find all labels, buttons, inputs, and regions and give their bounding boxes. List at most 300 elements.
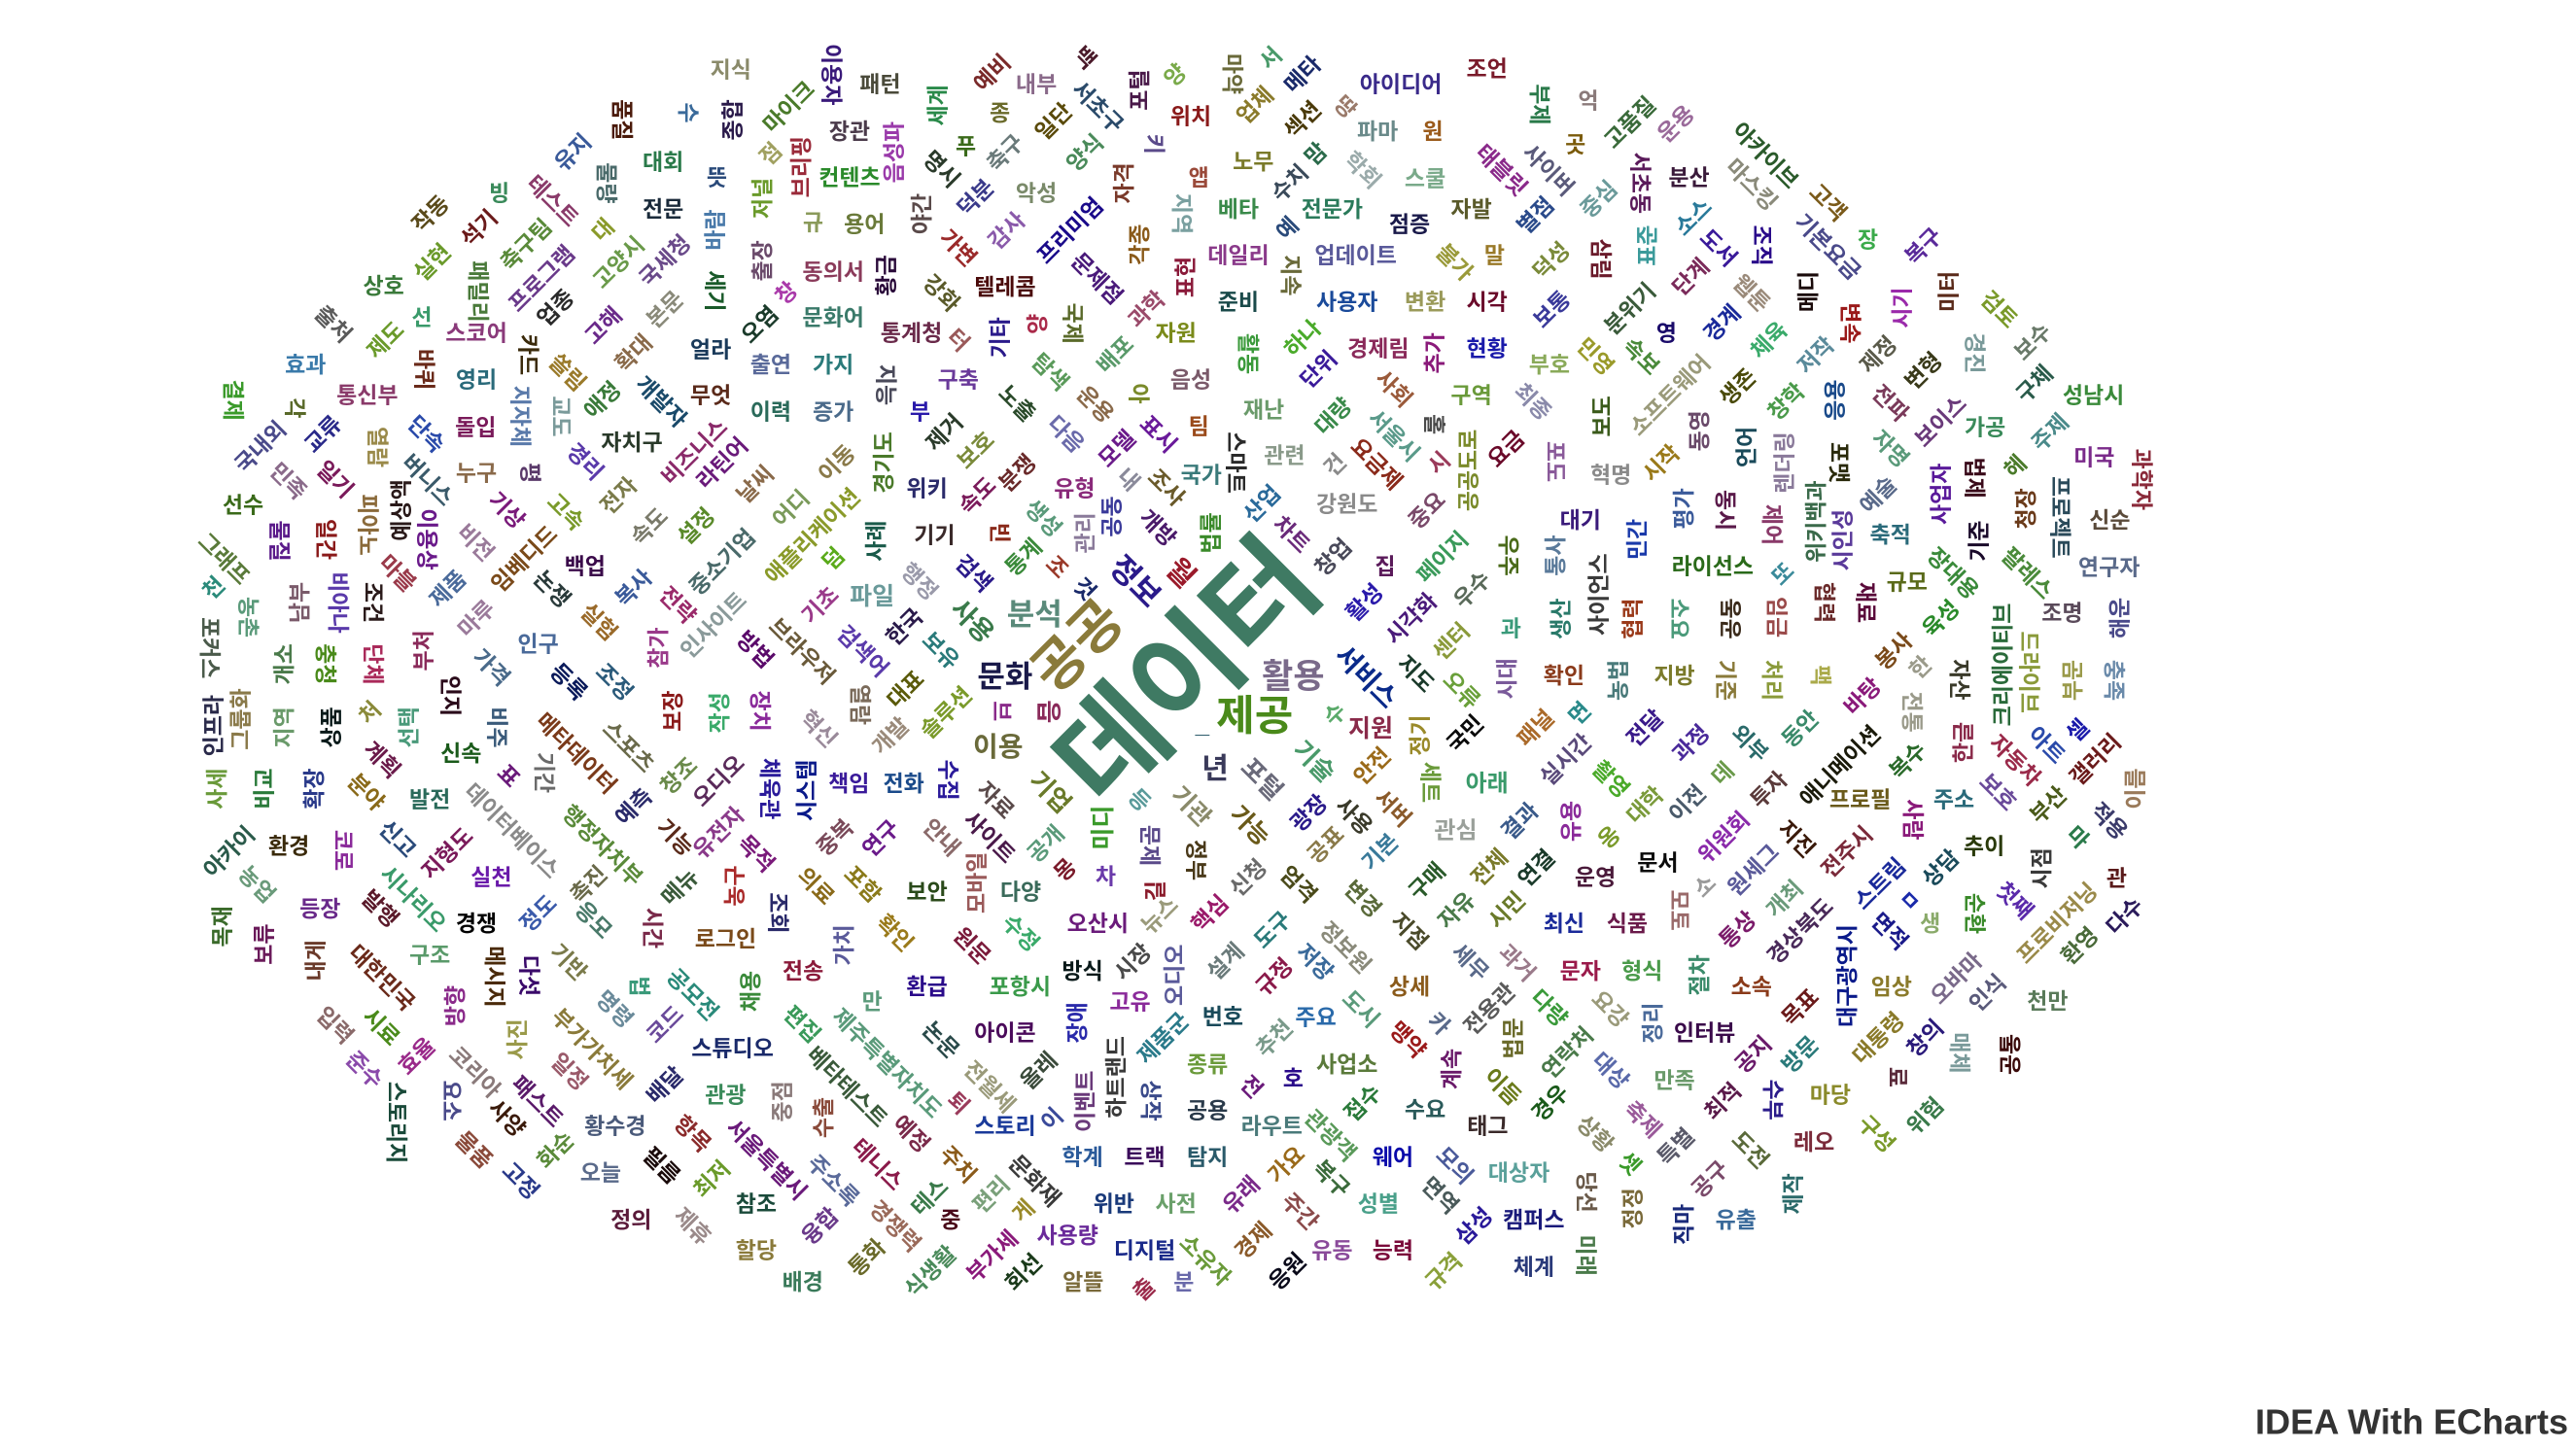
word group: center left: 방법 — [732, 626, 779, 672]
word group: middle left: 예측 — [610, 783, 657, 830]
word group: center right: 전달 — [1621, 705, 1668, 751]
word group: bottom left: 관광 — [705, 1083, 747, 1108]
word group: middle left: 인지 — [438, 675, 464, 716]
word group: center left: 포털 — [1236, 752, 1289, 806]
word group: top center right: 시 — [1423, 447, 1455, 479]
word group: top center left: 지역 — [1169, 193, 1195, 234]
word group: middle right: 갤러리 — [2065, 729, 2126, 790]
word group: bottom center right: 도시 — [1338, 985, 1384, 1032]
word group: top center right: 최종 — [1510, 378, 1556, 425]
word group: middle left: 확장 — [301, 769, 327, 810]
word group: top center left: 악성 — [1016, 180, 1057, 205]
word group: top left: 개발자 — [631, 371, 692, 432]
word group: top center left: 경기도 — [871, 431, 896, 494]
word group: middle right: 자산 — [1947, 659, 1972, 700]
word group: bottom right: 공통 — [1998, 1034, 2023, 1075]
word group: top right: 렌더링 — [1772, 431, 1797, 494]
word group: center left: 생성 — [1020, 495, 1066, 541]
word group: top center left: 위치 — [1170, 103, 1211, 128]
word group: center left: 보안 — [906, 879, 948, 904]
word group: bottom right: 공구 — [1687, 1155, 1733, 1202]
word group: top right: 응용 — [1822, 380, 1847, 421]
word group: bottom center right: 다량 — [1525, 984, 1573, 1031]
word group: top left: 국세청 — [634, 230, 696, 292]
word group: middle right: 드라이브 — [2016, 631, 2041, 713]
word group: center left — [732, 450, 1342, 939]
word group: top left: 자치구 — [601, 430, 663, 455]
word group: middle left: 등장 — [299, 896, 340, 921]
word group: top right: 변속 — [1838, 302, 1863, 343]
word group: middle right: 한글 — [1951, 722, 1976, 763]
word group: top center right: 수치 — [1267, 159, 1313, 206]
word group: top center right: 표준 — [1635, 225, 1660, 266]
word group: middle left: 분야 — [343, 769, 390, 815]
word group: bottom left: 법 — [627, 976, 652, 997]
word group: bottom center left: 식생활 — [900, 1241, 961, 1302]
word group: top right: 보이스 — [1910, 391, 1971, 452]
word group: center right: 면 — [1563, 697, 1596, 730]
word group: center left: 산업 — [1238, 480, 1285, 527]
word group: bottom right — [1687, 970, 2069, 1232]
word group: middle left: 상품 — [318, 707, 343, 747]
word group: middle left: 피아노 — [356, 494, 381, 556]
word group: bottom left: 제휴 — [669, 1203, 716, 1250]
word group: center left: 연구 — [857, 815, 904, 862]
word group: top center left: 활동 — [1236, 333, 1261, 374]
word group: center left: 검색 — [951, 550, 997, 597]
word group: top center left: 베타 — [1218, 196, 1259, 222]
word group: middle right: 환영 — [2056, 922, 2103, 969]
word group: middle right: 크리에이티브 — [1990, 603, 2015, 726]
word group: bottom center left: 배경 — [783, 1269, 823, 1294]
word group: bottom left: 물품 — [450, 1126, 498, 1173]
word group: top right: 주제 — [2027, 409, 2073, 456]
word group: middle right: 소속 — [1731, 974, 1772, 999]
word group: top center right: 섹션 — [1279, 96, 1326, 143]
word group: bottom center right: 세무 — [1446, 939, 1494, 985]
word group: top left: 열람 — [366, 427, 391, 467]
word group: top center right: 보통 — [1528, 286, 1576, 332]
word group: bottom center left: 수정 — [997, 910, 1044, 956]
word group: center left: 행정 — [896, 558, 943, 604]
word group: top center left: 백 — [1068, 42, 1101, 74]
word group: center left: 조회 — [766, 892, 791, 933]
word group: bottom right: 방문 — [1777, 1031, 1824, 1078]
word group: bottom center right: 캠퍼스 — [1503, 1207, 1565, 1232]
word group: bottom center left: 중점 — [769, 1081, 794, 1121]
word group: middle right: 오바마 — [1926, 948, 1987, 1009]
word group: bottom left: 기반 — [545, 939, 592, 985]
word group: bottom center left: 종류 — [1187, 1052, 1228, 1077]
word group: top left: 수 — [676, 102, 701, 123]
word group: middle right: 원세그 — [1723, 839, 1784, 901]
word group: center right: 공표 — [1302, 821, 1349, 868]
word group: bottom center right: 문자 — [1560, 958, 1601, 983]
word group: bottom right: 도전 — [1727, 1126, 1774, 1173]
word group: middle left: 민족 — [264, 458, 312, 504]
word group: top center left: 음성 — [1170, 367, 1211, 393]
word group: middle left: 보장 — [660, 691, 685, 732]
word group: bottom right: 창의 — [1901, 1015, 1949, 1061]
word group: top right: 헤 — [2000, 450, 2032, 483]
word group: bottom center left: 만 — [862, 989, 883, 1015]
word group: top right: 미터 — [1935, 271, 1961, 312]
word group: top right: 기본요금 — [1790, 209, 1865, 285]
word group: bottom right: 구성 — [1853, 1111, 1900, 1157]
word group: bottom left: 방향 — [442, 985, 468, 1026]
word group: top center left: 업체 — [1232, 82, 1278, 128]
word group: center right: 생산 — [1548, 599, 1573, 639]
word group: top left: 쏠림 — [544, 349, 591, 396]
word group: top right — [1713, 179, 2155, 570]
word group: top center right: 동영 — [1687, 410, 1712, 451]
word group: top center left: 기타 — [988, 317, 1013, 358]
word group: top right: 장 — [1858, 227, 1878, 253]
word group: bottom center right: 식품 — [1607, 911, 1648, 936]
word group: center left: 브라우저 — [764, 613, 840, 689]
word group: center right: 센터 — [1428, 618, 1475, 665]
word group: middle right: 마 — [2062, 821, 2094, 853]
word group: bottom left: 요소 — [438, 1081, 464, 1121]
word group: bottom center left: 예정 — [888, 1111, 935, 1157]
word group: center left: 신청 — [1225, 854, 1271, 901]
word group: bottom left: 경쟁 — [456, 911, 497, 936]
word group: center right: 구매 — [1404, 858, 1450, 905]
word group: top left: 돌입 — [455, 414, 496, 439]
word group: center left: 혁신 — [795, 706, 842, 752]
word group: center left: 자료 — [972, 776, 1019, 823]
word group: center left: 속도 — [954, 472, 1001, 519]
word group: middle left: 유전자 — [688, 802, 749, 863]
word group: top left: 스코어 — [445, 321, 507, 346]
word group: top left: 통신부 — [336, 383, 399, 408]
word group: top right: 청장 — [2013, 488, 2038, 529]
word group: top right: 위키백과 — [1803, 480, 1828, 563]
word group: middle left: 그래프 — [193, 528, 255, 590]
word group: top center left: 예비 — [969, 50, 1016, 96]
word group: bottom center right: 과거 — [1494, 940, 1541, 986]
word group: bottom center left: 회선 — [1000, 1249, 1047, 1295]
word group: top left: 업종 — [532, 285, 579, 331]
word group: bottom center right: 전용관 — [1459, 979, 1520, 1040]
word group: top right: 동시 — [1713, 490, 1738, 531]
word group: top left: 작동 — [407, 190, 454, 237]
word group: bottom center right: 축제 — [1619, 1096, 1666, 1143]
word group: center left: 전화 — [883, 771, 924, 796]
word group: middle left: 인구 — [517, 632, 559, 657]
word group: bottom center right — [1249, 907, 1735, 1294]
word group: middle left: 코로 — [331, 830, 356, 871]
word group: center left: 솔루션 — [916, 682, 977, 743]
word group: center right: 확인 — [1544, 663, 1584, 688]
word group: middle left: 실천 — [470, 865, 512, 890]
word group: middle left: 조건 — [361, 582, 386, 623]
word group: center left: 조사 — [1143, 465, 1190, 511]
word group: middle left: 일기 — [311, 456, 359, 502]
word group: bottom left: 부가가치세 — [546, 1004, 638, 1094]
word group: middle right: 육성 — [1917, 596, 1965, 642]
word group: top center left: 이력 — [750, 398, 791, 424]
word group: center right: 우주 — [1496, 535, 1521, 576]
word group: bottom center left: 탐지 — [1187, 1145, 1228, 1170]
word group: top left: 고양시 — [588, 231, 649, 293]
word group: top center right: 포도 — [1543, 441, 1568, 482]
word group: middle right: 생 — [1920, 911, 1940, 936]
word group: bottom center right: 모의 — [1431, 1142, 1479, 1189]
word group: top center left: 양 — [1025, 314, 1050, 334]
word group: top center left: 규 — [803, 209, 823, 234]
word group: top center right: 부호 — [1529, 352, 1570, 377]
word group: top center left: 스마트 — [1223, 431, 1248, 494]
word group: bottom center left: 포항시 — [990, 974, 1051, 999]
word group: bottom left: 내게 — [302, 940, 328, 981]
word group: center left: 유형 — [1054, 476, 1096, 501]
word group: bottom center right: 정보원 — [1314, 916, 1376, 979]
word group: bottom left: 보류 — [251, 924, 276, 965]
word group: bottom center right: 도구 — [1249, 907, 1296, 953]
word group: bottom right: 마당 — [1810, 1083, 1851, 1108]
word group: top right: 기준 — [1967, 521, 1992, 562]
word group: middle left: 인사이트 — [676, 587, 751, 663]
word group: center right: 강원도 — [1316, 491, 1377, 516]
word group: center right: 결과 — [1496, 798, 1544, 845]
word group: bottom left: 코리아 — [444, 1042, 505, 1103]
word group: bottom center right: 유동 — [1311, 1238, 1353, 1263]
word group: center right: 과 — [1501, 616, 1521, 641]
word group: center right: 정기 — [1408, 715, 1433, 756]
word group: bottom center left: 경제 — [1230, 1218, 1276, 1264]
word group: bottom right: 제작 — [1781, 1173, 1806, 1214]
word group: top center right: 태블릿 — [1471, 139, 1532, 201]
word group: top center right: 도서 — [1695, 224, 1742, 271]
word group: top center right: 운용 — [1653, 100, 1699, 147]
word group: bottom left: 오늘 — [580, 1160, 621, 1186]
word group: bottom left: 시료 — [358, 1004, 404, 1051]
word group: center right: 엄격 — [1275, 861, 1322, 908]
word group: bottom center right: 절차 — [1687, 954, 1712, 995]
word group: bottom center right: 미래 — [1573, 1235, 1598, 1276]
word group: center left: 중복 — [812, 814, 858, 861]
word cloud — [193, 42, 2155, 1305]
word group: top center left: 구축 — [938, 367, 979, 393]
word group: bottom center right: 카 — [1423, 1008, 1455, 1040]
word group: center left: 월 — [1160, 553, 1201, 594]
word group: top center right: 땅 — [1329, 90, 1362, 123]
word group: middle left: 비전 — [452, 519, 499, 566]
word group: bottom left: 정의 — [610, 1207, 651, 1232]
word group: top center left: 창 — [770, 277, 803, 309]
word group: bottom center left: 경쟁력 — [864, 1195, 925, 1257]
word group: top center left: 자격 — [1111, 162, 1136, 203]
word group: middle left: 선택 — [396, 707, 421, 747]
word group: bottom left: 사양 — [483, 1095, 531, 1142]
word group: bottom left: 목재 — [210, 906, 235, 947]
word group: center right: 창업 — [1309, 534, 1357, 580]
word group: top center left: 국제 — [1061, 303, 1086, 344]
word group: middle left: 가격 — [468, 644, 515, 691]
word group: middle right: 연구자 — [2078, 554, 2140, 579]
word group: bottom center right: 형식 — [1621, 958, 1662, 983]
word group: center left: 모바일 — [963, 852, 989, 914]
word group: bottom center left: 이벤트 — [1072, 1071, 1097, 1132]
word group: middle left: 오디오 — [688, 750, 749, 811]
word group: top center right: 스쿨 — [1405, 165, 1445, 190]
word group: middle left: 단체 — [361, 643, 386, 684]
word group: bottom left: 스토리지 — [384, 1082, 409, 1163]
word group: middle right: 조명 — [2041, 601, 2083, 626]
word group: middle right: 셀 — [2062, 714, 2094, 746]
word group: bottom center right: 관광객 — [1300, 1105, 1361, 1166]
word group: center left: 조 — [1041, 551, 1073, 583]
word group: center left: 책임 — [828, 771, 869, 796]
word group: bottom center left: 중 — [940, 1207, 960, 1232]
word group: middle right: 전주시 — [1816, 821, 1878, 882]
word group: bottom center right: 능력 — [1373, 1238, 1413, 1263]
word group: top center right: 사이버 — [1517, 139, 1579, 201]
word group: top center right: 조직 — [1749, 225, 1774, 266]
word group: middle left: 임베디드 — [486, 521, 562, 597]
word group: top center left: 양식 — [1062, 129, 1108, 176]
word group: bottom left: 준수 — [341, 1047, 388, 1093]
word group: bottom center right: 연락처 — [1537, 1022, 1598, 1084]
word group: middle right: 부산 — [2025, 781, 2071, 828]
word group: top right: 검토 — [1975, 286, 2023, 332]
word group: bottom center left: 라우트 — [1240, 1113, 1303, 1138]
word group: top center left: 통계청 — [881, 321, 942, 346]
word group: center right: 패널 — [1512, 705, 1559, 751]
word group: top right: 시인성 — [1830, 509, 1856, 570]
word group: top right: 축적 — [1869, 522, 1911, 547]
word group: top left: 지자체 — [508, 386, 534, 447]
word group: top center right: 속보 — [1618, 333, 1665, 380]
word group: bottom center left: 분 — [1173, 1269, 1194, 1294]
word group: middle right: 면적 — [1866, 908, 1913, 954]
word group: center left: 미디 — [1090, 806, 1117, 850]
word group: center right: 집 — [1375, 554, 1396, 579]
word group: top left: 고해 — [580, 302, 627, 349]
word group: bottom right: 최적 — [1699, 1078, 1746, 1124]
word group: bottom left: 고정 — [498, 1157, 544, 1204]
word group: center right: 라이선스 — [1671, 554, 1754, 579]
word group: middle left: 작성 — [707, 692, 732, 733]
word group: middle left: 제품 — [425, 566, 471, 612]
word group: middle left: 지형도 — [416, 823, 478, 884]
word group: top center right: 아이디어 — [1360, 72, 1442, 97]
word group: center right: 서버 — [1370, 785, 1416, 832]
word group: top right: 포맷 — [1827, 442, 1852, 483]
word group: top center right: 요금제 — [1345, 433, 1408, 495]
word group: top left: 본문 — [642, 286, 688, 332]
word group: top center left: 포털 — [1127, 70, 1152, 111]
word group: bottom right: 료 — [1885, 1067, 1910, 1087]
word group: middle right: 사람 — [1900, 799, 1926, 840]
word group: bottom center left: 디지털 — [1114, 1238, 1175, 1263]
word group: bottom right: 매체 — [1947, 1032, 1972, 1073]
word group: bottom center right: 주요 — [1295, 1005, 1337, 1030]
word group: middle left: 행정자치부 — [557, 800, 647, 891]
word group: top center right: 점증 — [1389, 212, 1430, 237]
word group: top center left: 가변 — [935, 224, 982, 271]
word group: center left: 브 — [989, 701, 1014, 721]
word group: bottom center left: 올레 — [1015, 1048, 1062, 1094]
word group: center right: 지도 — [1392, 650, 1440, 697]
word group: middle left: 촉진 — [565, 861, 612, 908]
word group: top left: 바퀴 — [411, 349, 436, 390]
word group: top center right: 맘 — [1300, 138, 1332, 170]
word group: bottom center left: 하트랜드 — [1103, 1036, 1129, 1119]
word group: top left: 상호 — [363, 273, 404, 298]
word group: top center right: 혁명 — [1590, 462, 1631, 487]
word group: center right: 세트 — [1417, 762, 1443, 803]
word group: middle left: 일간 — [314, 519, 339, 560]
word group: center right: 대학 — [1621, 781, 1668, 828]
word group: top center left: 일단 — [1030, 98, 1077, 145]
word group: top left: 실현 — [408, 239, 456, 286]
word group: bottom center right: 최신 — [1544, 911, 1584, 936]
word group: top center left: 터 — [942, 324, 974, 357]
word group: middle left: 정도 — [514, 890, 562, 937]
word group: center left: 시스템 — [793, 760, 818, 821]
word group: top left: 교도 — [548, 396, 574, 436]
word group: bottom center left: 문화재 — [1004, 1150, 1065, 1212]
word group: middle left: 설정 — [673, 503, 719, 550]
word group: middle left: 인프라 — [201, 695, 226, 756]
word group: middle left: 평 — [518, 463, 543, 483]
word group: center left: 정부 — [1183, 840, 1208, 880]
word group: middle left: 개소 — [271, 643, 296, 684]
word group: center right: 연결 — [1513, 845, 1560, 891]
word group: middle left: 계획 — [359, 737, 405, 783]
word group: top center right: 분위기 — [1599, 278, 1660, 339]
word group: bottom center right: 수요 — [1405, 1097, 1445, 1122]
word group: center left: 차 — [1096, 864, 1116, 889]
word group: center left: 보유 — [918, 627, 964, 673]
word group: top left: 영리 — [456, 367, 497, 393]
word group: middle right: 시점 — [2029, 847, 2054, 888]
word group: top center left: 양 — [1159, 59, 1192, 91]
word group: middle right: 프로비저닝 — [2011, 878, 2103, 969]
word group: bottom center right: 셋 — [1614, 1148, 1646, 1180]
word group: center left: 통계 — [1000, 534, 1047, 580]
word group: bottom center left: 베타테스트 — [802, 1042, 892, 1132]
word group: top center right: 창학 — [1762, 378, 1810, 425]
word group: top right: 전파 — [1866, 380, 1914, 427]
word group: top center left: 종 — [990, 100, 1010, 125]
word group: bottom center right: 성별 — [1358, 1190, 1399, 1216]
word group: bottom center left: 환급 — [906, 974, 948, 999]
word group: bottom center right: 웨어 — [1373, 1145, 1413, 1170]
word group: bottom center left: 사용량 — [1036, 1223, 1098, 1248]
word group: center right: 이전 — [1664, 780, 1711, 827]
word group: center right: 소 — [1688, 870, 1721, 902]
word group: top center left: 노출 — [993, 380, 1041, 427]
word group: top center right: 중심 — [1575, 176, 1622, 223]
word group: bottom left: 공모전 — [662, 964, 723, 1025]
word group: middle left: 메뉴 — [656, 864, 703, 911]
word group: center right: 평가 — [1671, 488, 1696, 529]
word group: top center right: 말 — [1484, 243, 1505, 268]
word group: top center left: 황금 — [873, 255, 898, 295]
word group: top center left: 모델 — [1094, 426, 1140, 472]
word group: middle left: 논쟁 — [529, 566, 575, 612]
word group: center left: 문제 — [1137, 825, 1163, 866]
word group: center right: 시민 — [1483, 887, 1530, 934]
word group: bottom center left: 융합 — [796, 1203, 844, 1250]
word group: bottom center right: 규격 — [1420, 1248, 1467, 1294]
word group: center left: 빈 — [988, 523, 1013, 543]
word group: top center right: 불가 — [1431, 239, 1479, 286]
word group: top center left: 이동 — [814, 440, 860, 487]
